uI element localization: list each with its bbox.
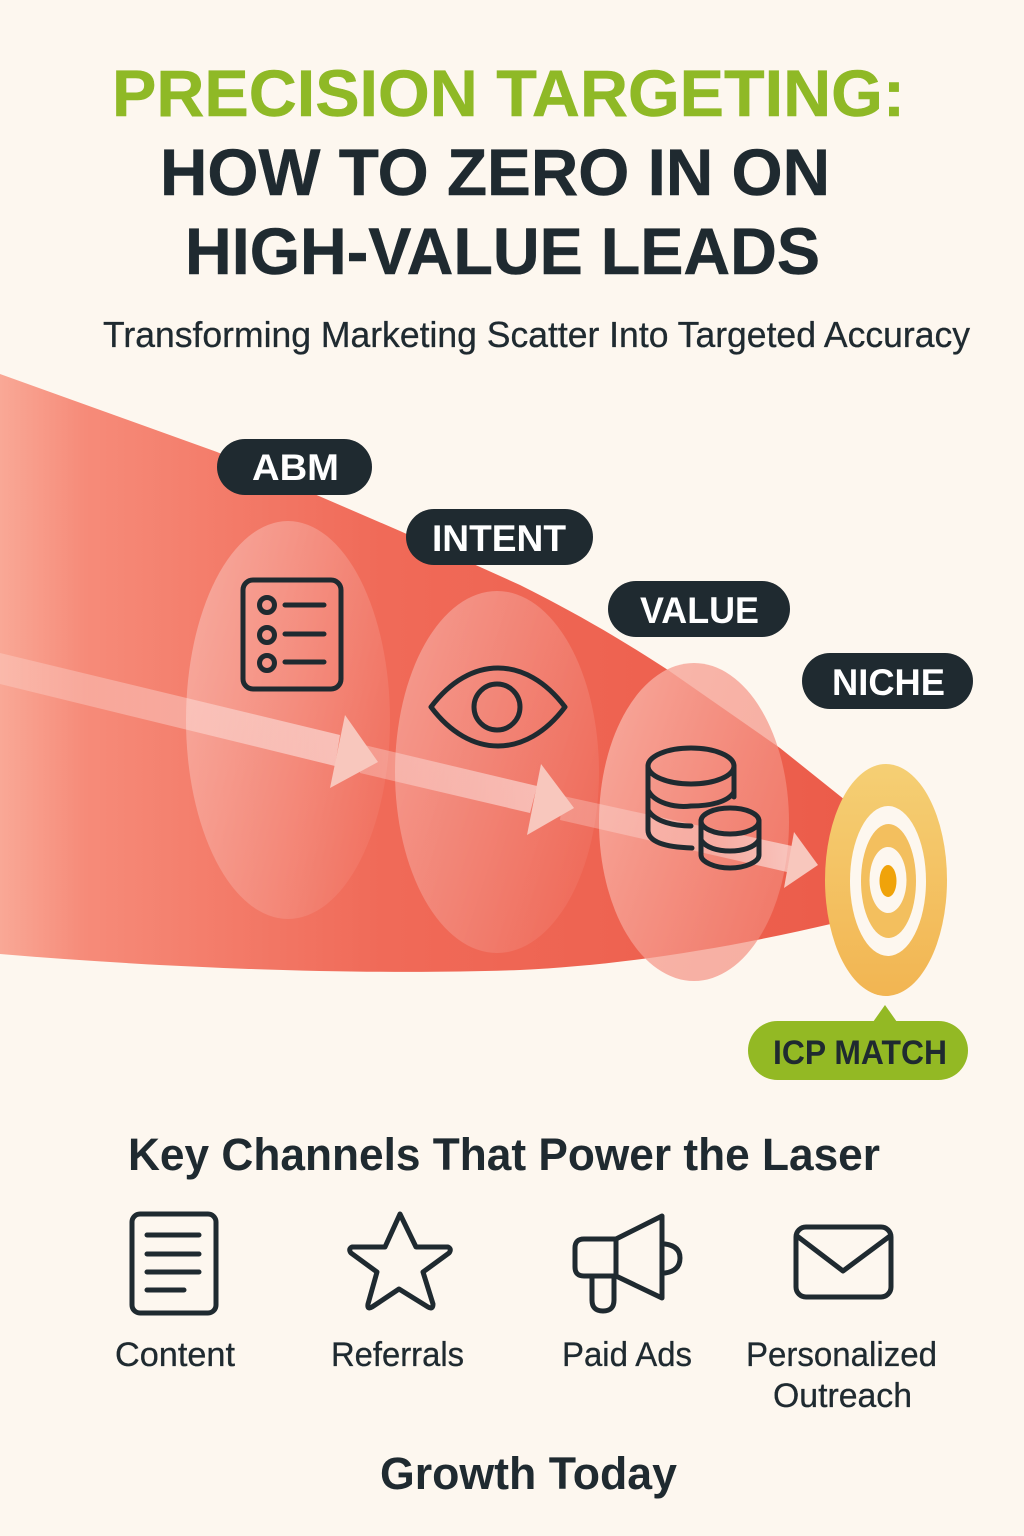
icon: envelope: [796, 1227, 891, 1297]
title: [112, 56, 905, 288]
target: [825, 764, 947, 996]
subtitle: Transforming Marketing Scatter Into Targeted Accuracy: [103, 314, 970, 355]
target bullseye: [880, 865, 896, 897]
label: ABM: [217, 439, 372, 495]
label: ICP MATCH: ICP MATCH: [773, 1034, 947, 1072]
label: ABM: ABM: [252, 447, 339, 488]
label: Outreach: [773, 1377, 912, 1415]
icon: megaphone: [575, 1216, 680, 1311]
title line 2: HOW TO ZERO IN ON: [160, 135, 830, 209]
label: INTENT: [406, 509, 593, 565]
title line 1: PRECISION TARGETING:: [112, 56, 905, 130]
stage ellipse 1: [186, 521, 390, 919]
icon: star: [350, 1214, 450, 1308]
label: VALUE: [608, 581, 790, 637]
target inner white: [870, 847, 906, 913]
label: ICP MATCH: [748, 1005, 968, 1080]
icon: checklist: [243, 580, 341, 689]
label: Referrals: [331, 1336, 464, 1374]
stage ellipse 2: [395, 591, 599, 953]
channel: content: [115, 1214, 236, 1374]
icon: document: [132, 1214, 216, 1313]
target white ring: [850, 806, 926, 956]
icon: eye: [431, 668, 565, 746]
channel: referrals: [331, 1214, 464, 1374]
target outer ring: [825, 764, 947, 996]
arrow 2: [360, 744, 574, 835]
title line 3: HIGH-VALUE LEADS: [185, 214, 820, 288]
label: [746, 1336, 937, 1415]
label: VALUE: VALUE: [640, 590, 759, 631]
label: INTENT: INTENT: [432, 518, 566, 559]
laser beam funnel: [0, 374, 850, 972]
label: Content: [115, 1336, 236, 1374]
heading: key channels: Key Channels That Power the Laser: [128, 1129, 880, 1180]
icon: database coins: [648, 748, 759, 868]
channel: personalized outreach: [746, 1227, 937, 1415]
label: Personalized: [746, 1336, 937, 1374]
target inner ring: [861, 824, 916, 938]
label: NICHE: [802, 653, 973, 709]
label: Paid Ads: [562, 1336, 692, 1374]
arrow 3: [560, 796, 818, 888]
footer brand: Growth Today: [380, 1448, 677, 1499]
stage ellipse 3: [599, 663, 789, 981]
label: NICHE: NICHE: [832, 662, 945, 703]
channel: paid ads: [562, 1216, 692, 1374]
arrow 1: [0, 653, 378, 788]
laser beam diagram: [0, 374, 973, 1080]
